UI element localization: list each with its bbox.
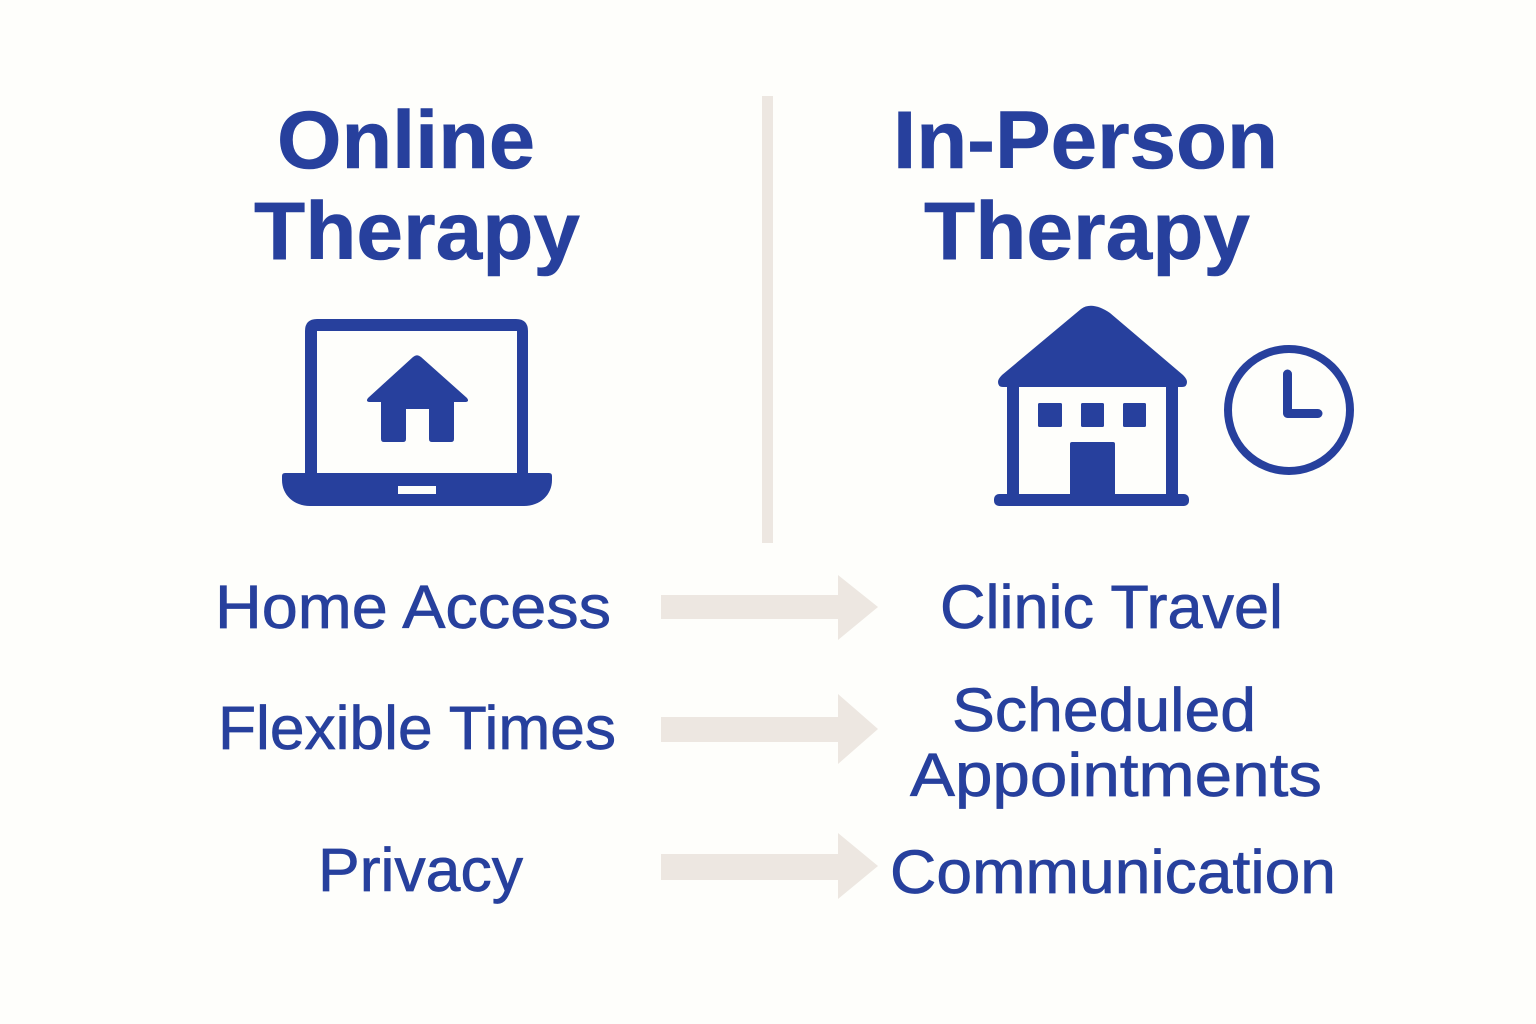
row 3: Communication: Communication bbox=[890, 838, 1336, 906]
heading: In-Person Therapy: Therapy bbox=[924, 186, 1250, 277]
arrow: row 2 bbox=[661, 694, 878, 764]
row 2: Scheduled Appointments: Appointments bbox=[910, 741, 1322, 809]
row 2: Scheduled Appointments bbox=[910, 676, 1322, 809]
arrow: row 1 bbox=[661, 575, 878, 640]
heading: Online Therapy: Therapy bbox=[254, 186, 580, 277]
row 1: Home Access: Home Access bbox=[215, 573, 611, 641]
row 2: Scheduled Appointments: Scheduled bbox=[952, 676, 1256, 744]
icon: clinic building bbox=[994, 306, 1189, 506]
icon: laptop with house bbox=[282, 319, 552, 506]
arrow: row 3 bbox=[661, 833, 878, 899]
row 1: Clinic Travel: Clinic Travel bbox=[940, 573, 1283, 641]
icon: clock bbox=[1228, 349, 1350, 471]
heading: Online Therapy: Online bbox=[277, 95, 535, 186]
heading: In-Person Therapy: In-Person bbox=[893, 95, 1278, 186]
row 2: Flexible Times: Flexible Times bbox=[218, 694, 616, 762]
row 3: Privacy: Privacy bbox=[318, 836, 524, 904]
heading: Online Therapy bbox=[254, 95, 580, 277]
heading: In-Person Therapy bbox=[893, 95, 1278, 277]
